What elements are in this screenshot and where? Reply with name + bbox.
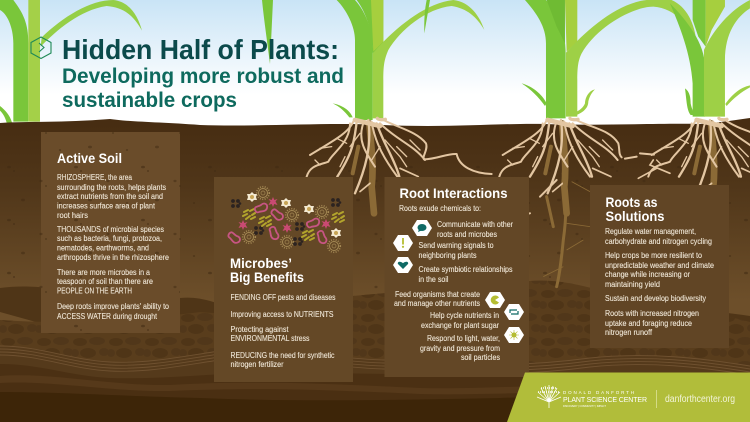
soil ground — [0, 118, 750, 422]
dark mounds — [0, 286, 750, 340]
microbes text: FENDING OFF pests and diseases — [230, 292, 336, 302]
panel: root interactions — [384, 177, 529, 377]
root interactions text: Respond to light, water, — [427, 333, 500, 343]
heading: microbes — [230, 255, 304, 285]
active soil text — [57, 172, 169, 321]
active soil text: There are more microbes in a — [57, 267, 150, 277]
footer logo — [537, 385, 561, 408]
subtitle: Developing more robust and — [62, 65, 344, 88]
microbes illustration — [227, 187, 344, 252]
heading: microbes: Microbes’ — [230, 255, 292, 271]
heading: active soil: Active Soil — [57, 150, 122, 166]
active soil text: THOUSANDS of microbial species — [57, 224, 164, 234]
title line 1: Hidden Half of Plants: — [62, 34, 339, 65]
footer organization name: DISCOVERY | COMMUNITY | IMPACT — [563, 405, 606, 408]
roots: plant 3 — [499, 118, 654, 287]
roots as solutions text: Roots with increased nitrogen — [605, 308, 699, 318]
root interactions text — [394, 203, 513, 362]
panel: roots as solutions — [590, 185, 729, 348]
active soil text: teaspoon of soil than there are — [57, 276, 153, 286]
narrow leaf — [262, 0, 273, 64]
heading: root interactions: Root Interactions — [400, 185, 508, 201]
roots as solutions text: change while increasing or — [605, 269, 690, 279]
footer url: danforthcenter.org — [665, 394, 735, 405]
root interactions text: Help cycle nutrients in — [430, 310, 499, 320]
microbes text: Protecting against — [230, 324, 289, 334]
roots as solutions text: carbohydrate and nitrogen cycling — [605, 236, 712, 246]
root interactions text: gravity and pressure from — [420, 343, 500, 353]
active soil text: ACCESS WATER during drought — [57, 311, 157, 321]
roots: plant 2 — [307, 118, 492, 213]
root interactions text: Send warning signals to — [418, 240, 494, 250]
title icon: hexagon chevron — [31, 37, 51, 58]
sky background — [0, 0, 750, 126]
panel: microbes — [214, 177, 353, 382]
root interactions text: neighboring plants — [418, 250, 476, 260]
pebble layer — [0, 281, 750, 380]
heading: microbes: Big Benefits — [230, 269, 304, 285]
icon: speech bubble — [412, 220, 432, 236]
root interactions text: roots and microbes — [437, 229, 497, 239]
microbes text — [230, 292, 336, 369]
active soil text: Deep roots improve plants' ability to — [57, 301, 169, 311]
corn plants — [0, 0, 750, 123]
microbes text: Improving access to NUTRIENTS — [230, 309, 334, 319]
root interactions text: exchange for plant sugar — [421, 320, 499, 330]
roots as solutions text — [605, 226, 714, 337]
heading: roots as solutions — [606, 194, 665, 224]
roots: plant 4 — [638, 118, 750, 213]
microbes text: nitrogen fertilizer — [230, 359, 284, 369]
active soil text: surrounding the roots, helps plants — [57, 182, 166, 192]
active soil text: root hairs — [57, 210, 88, 220]
subtitle: sustainable crops — [62, 89, 237, 112]
root interactions text: Roots exude chemicals to: — [399, 203, 481, 213]
roots as solutions text: unpredictable weather and climate — [605, 260, 714, 270]
title — [62, 34, 344, 112]
root interactions text: Communicate with other — [437, 219, 513, 229]
active soil text: nematodes, earthworms, and — [57, 242, 149, 252]
plant 1 — [0, 0, 142, 123]
subtitle — [62, 65, 344, 112]
striped soil strata — [0, 346, 750, 422]
icon: heart — [393, 257, 413, 273]
roots as solutions text: Sustain and develop biodiversity — [605, 293, 707, 303]
heading: roots as solutions: Solutions — [606, 208, 665, 224]
root interactions text: and manage other nutrients — [394, 298, 480, 308]
root interactions text: in the soil — [418, 274, 449, 284]
footer organization name: DONALD DANFORTH — [563, 390, 636, 395]
root interactions text: Create symbiotic relationships — [418, 264, 512, 274]
active soil text: RHIZOSPHERE, the area — [57, 172, 132, 182]
active soil text: such as bacteria, fungi, protozoa, — [57, 233, 162, 243]
plant 4 — [670, 0, 750, 117]
roots as solutions text: Regulate water management, — [605, 226, 696, 236]
plant 2 — [333, 0, 484, 120]
footer organization name: PLANT SCIENCE CENTER — [563, 397, 647, 404]
microbes text: ENVIRONMENTAL stress — [230, 333, 310, 343]
footer band — [507, 372, 750, 422]
root interactions text: Feed organisms that create — [395, 289, 480, 299]
root interactions text: soil particles — [461, 352, 500, 362]
plant 3 — [522, 0, 697, 118]
panel: active soil — [41, 132, 180, 333]
icon: sun — [504, 327, 524, 343]
microbes text: REDUCING the need for synthetic — [230, 350, 335, 360]
heading: roots as solutions: Roots as — [606, 194, 658, 210]
roots as solutions text: nitrogen runoff — [605, 327, 653, 337]
icon: cycle arrows — [504, 304, 524, 320]
icon: pac-man nutrient — [485, 292, 505, 308]
roots as solutions text: maintaining yield — [605, 279, 660, 289]
active soil text: arthropods thrive in the rhizosphere — [57, 252, 169, 262]
roots as solutions text: uptake and foraging reduce — [605, 318, 692, 328]
footer organization name — [563, 390, 647, 408]
active soil text: increases surface area of plant — [57, 200, 156, 210]
roots as solutions text: Help crops be more resilient to — [605, 250, 702, 260]
active soil text: extract nutrients from the soil and — [57, 191, 163, 201]
icon: warning — [393, 235, 413, 251]
active soil text: PEOPLE ON THE EARTH — [57, 286, 132, 296]
